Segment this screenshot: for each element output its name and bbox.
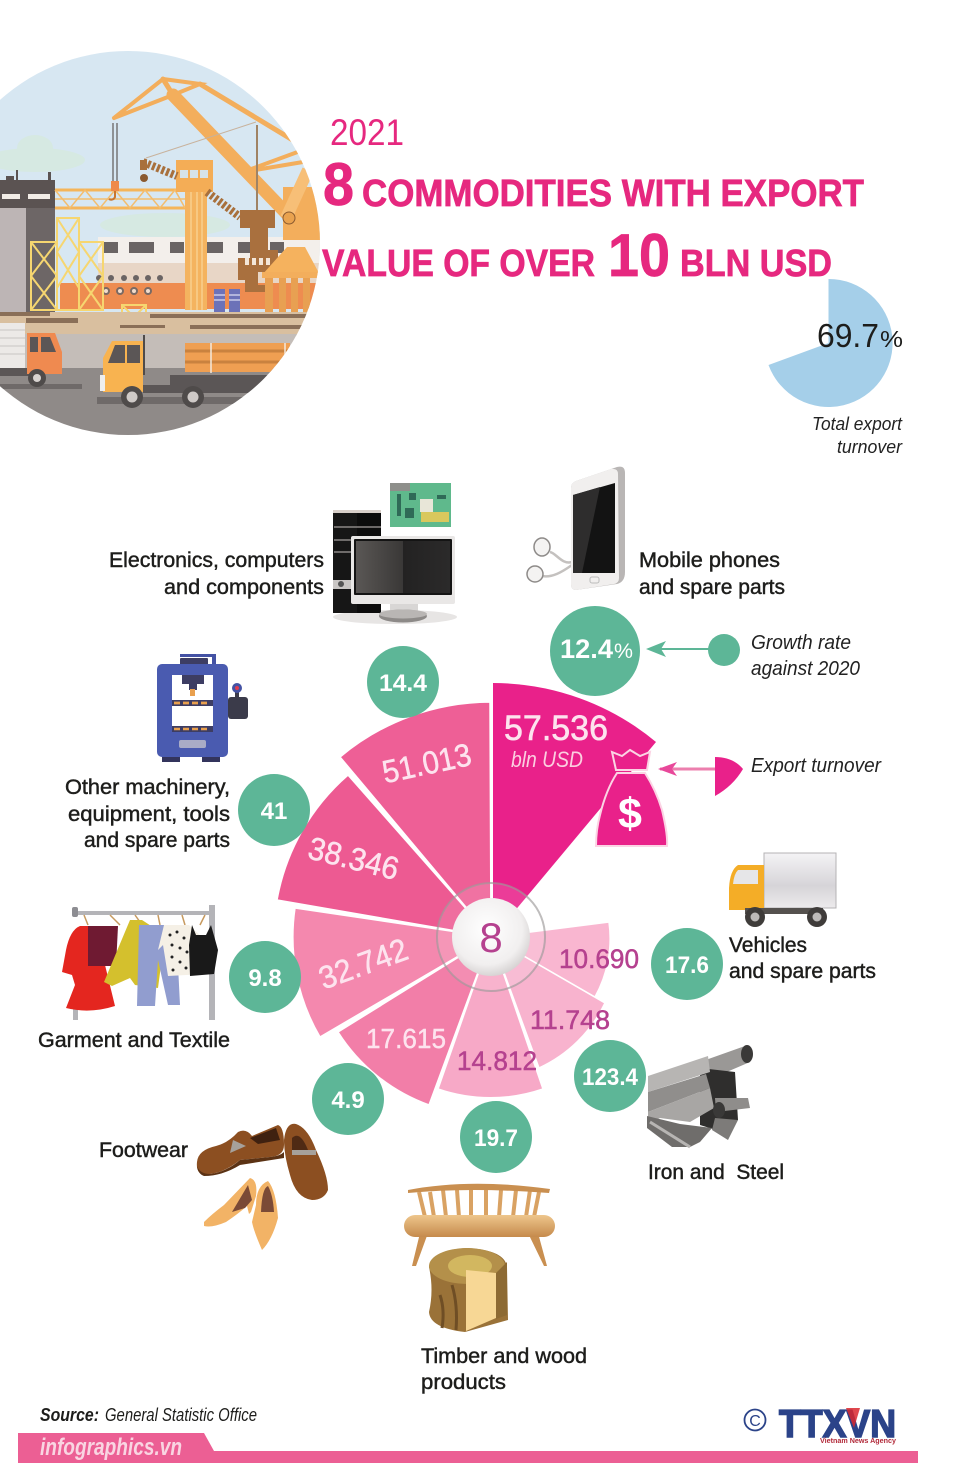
- icon: money bag: $: [618, 790, 642, 838]
- label: other machinery: equipment, tools: [68, 803, 230, 826]
- icon: wooden bench: [404, 1184, 555, 1266]
- value: 11.748: 11.748: [530, 1005, 610, 1035]
- radial chart: export turnover by commodity: [277, 683, 656, 1105]
- logo: TTXVN: Vietnam News Agency: [820, 1438, 896, 1445]
- growth badge: 19.7: [460, 1101, 532, 1173]
- wedge: vehicles: [491, 922, 610, 997]
- label: footwear: Footwear: [99, 1139, 188, 1162]
- value: 14.812: 14.812: [457, 1046, 537, 1076]
- icon: machinery press: [157, 654, 248, 762]
- growth badge: 9.8: 9.8: [248, 965, 282, 992]
- logo: TTXVN: C: [749, 1413, 761, 1430]
- label: other machinery: Other machinery,: [65, 776, 230, 799]
- label: garment and textile: Garment and Textile: [38, 1029, 230, 1052]
- source: [40, 1405, 257, 1425]
- growth badge: 19.7: 19.7: [474, 1125, 518, 1152]
- pie chart: share of total export turnover: [768, 279, 903, 457]
- centre badge: 8: [437, 883, 545, 991]
- wedge: electronics: [340, 702, 491, 937]
- pie chart: share of total export turnover: 69.7: [817, 317, 879, 354]
- icon: money bag: [596, 750, 667, 846]
- label: iron and steel: Iron and Steel: [648, 1161, 784, 1184]
- value: 51.013: 51.013: [379, 736, 474, 790]
- value: 32.742: 32.742: [314, 931, 413, 996]
- label: other machinery: and spare parts: [84, 829, 230, 852]
- pie chart: share of total export turnover: %: [880, 326, 903, 352]
- growth badge: 17.6: 17.6: [665, 952, 709, 979]
- label: timber and wood: products: [421, 1371, 506, 1394]
- pie chart: share of total export turnover: Total export: [812, 414, 903, 434]
- growth badge: 4.9: 4.9: [331, 1087, 365, 1114]
- centre badge: 8: 8: [479, 914, 503, 961]
- value unit: bln USD: [511, 747, 583, 772]
- label: electronics: and components: [164, 576, 324, 599]
- growth badge: 12.4%: %: [614, 640, 633, 663]
- legend: export turnover: Export turnover: [751, 755, 882, 777]
- icon: tree stump: [429, 1248, 508, 1332]
- wedge: iron and steel: [491, 937, 605, 1068]
- logo: TTXVN: TTXVN: [779, 1403, 896, 1446]
- growth badge: 123.4: [574, 1040, 646, 1112]
- wedge: garment: [293, 908, 491, 1037]
- label: vehicles: [729, 934, 876, 983]
- title: 2021: [330, 112, 404, 153]
- growth badge: 14.4: 14.4: [379, 670, 428, 697]
- legend: growth rate: [646, 632, 860, 680]
- label: vehicles: and spare parts: [729, 960, 876, 983]
- source: General Statistic Office: [105, 1405, 257, 1425]
- wedge: footwear: [338, 937, 491, 1105]
- growth badge: 123.4: 123.4: [582, 1064, 639, 1091]
- growth badge: 17.6: [651, 928, 723, 1000]
- label: mobile phones: Mobile phones: [639, 549, 780, 572]
- label: electronics: [109, 549, 324, 599]
- title: 8: [323, 151, 354, 218]
- footer band: infographics.vn: [40, 1434, 182, 1461]
- growth badge: 41: [238, 774, 310, 846]
- label: vehicles: Vehicles: [729, 934, 807, 957]
- value: 10.690: 10.690: [559, 944, 639, 974]
- wedge: timber: [438, 937, 543, 1098]
- source: Source:: [40, 1405, 99, 1425]
- legend: growth rate: against 2020: [751, 658, 860, 680]
- label: mobile phones: [639, 549, 785, 599]
- growth badge: 14.4: [367, 646, 439, 718]
- illustration: port scene in a circle: [0, 50, 330, 440]
- icon: computer and motherboard: [333, 483, 457, 624]
- growth badge: 12.4%: 12.4: [560, 634, 613, 664]
- icon: shoes: [197, 1124, 328, 1250]
- label: electronics: Electronics, computers: [109, 549, 324, 572]
- footer band: [18, 1433, 918, 1463]
- icon: mobile phone and earphones: [527, 467, 625, 590]
- label: mobile phones: and spare parts: [639, 576, 785, 599]
- label: other machinery: [65, 776, 230, 852]
- growth badge: 9.8: [229, 941, 301, 1013]
- growth badge: 41: 41: [261, 798, 287, 825]
- value: 38.346: 38.346: [305, 830, 403, 887]
- title: COMMODITIES WITH EXPORT: [362, 173, 864, 215]
- wedge: machinery: [277, 775, 491, 937]
- icon: clothes on a rack: [62, 905, 218, 1020]
- legend: growth rate: Growth rate: [751, 632, 851, 654]
- pie chart: share of total export turnover: turnover: [837, 437, 903, 457]
- title: 10: [608, 222, 670, 289]
- label: timber and wood: [421, 1345, 587, 1394]
- title: BLN USD: [680, 243, 832, 285]
- icon: delivery truck: [729, 853, 836, 927]
- value: 17.615: 17.615: [366, 1023, 446, 1054]
- icon: steel bars: [647, 1045, 753, 1147]
- growth badge: 12.4%: [550, 606, 640, 696]
- legend: export turnover: [658, 755, 882, 796]
- title: [322, 112, 864, 289]
- wedge: mobile phones: [493, 683, 656, 937]
- label: timber and wood: Timber and wood: [421, 1345, 587, 1368]
- title: VALUE OF OVER: [322, 243, 595, 285]
- value: 57.536: 57.536: [504, 709, 608, 748]
- growth badge: 4.9: [312, 1063, 384, 1135]
